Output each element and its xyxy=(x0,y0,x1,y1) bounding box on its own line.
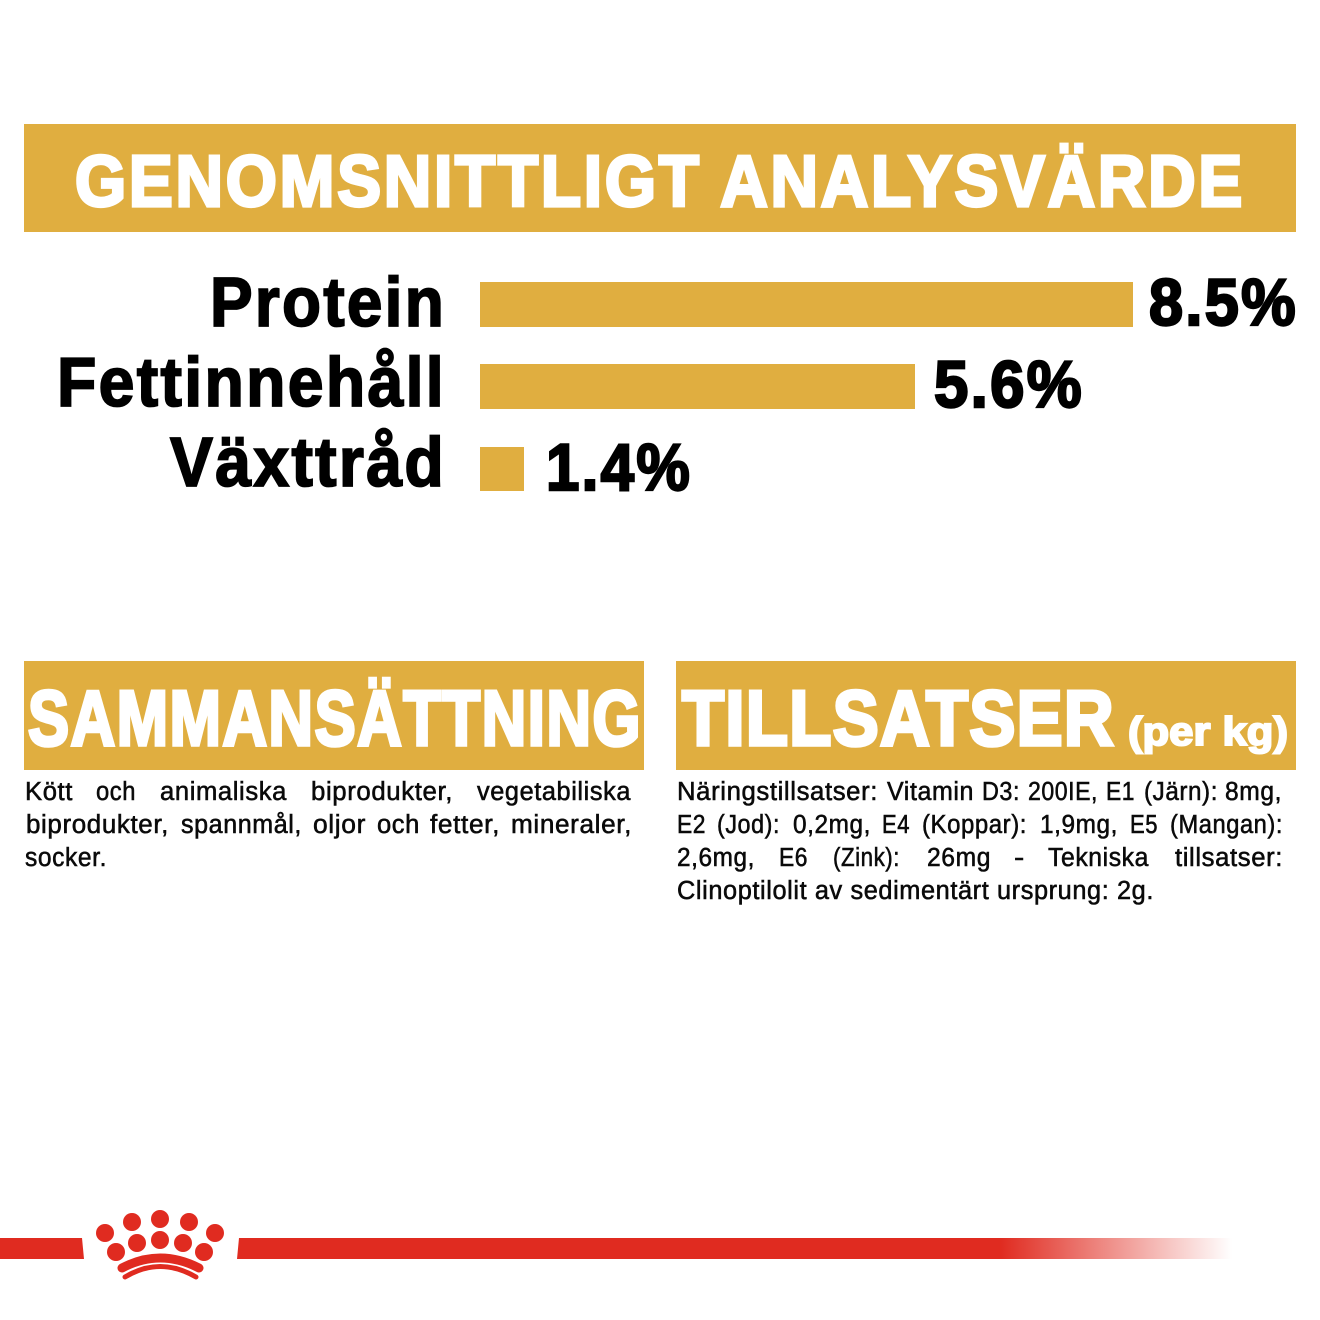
text block: additives: (Zink): xyxy=(833,844,900,872)
text block: composition: spannmål, xyxy=(181,811,302,839)
row: protein xyxy=(210,263,1298,341)
text block: composition: animaliska xyxy=(160,778,287,806)
text block: additives: - xyxy=(1014,844,1025,872)
heading: analysis: GENOMSNITTLIGT ANALYSVÄRDE xyxy=(75,142,1245,222)
text block: additives: (Mangan): xyxy=(1170,811,1283,839)
panel: analysis header xyxy=(24,124,1296,232)
text block: additives: E1 xyxy=(1106,778,1135,806)
text block: additives: 0,2mg, xyxy=(793,811,871,839)
row: protein: 8.5% xyxy=(1149,265,1298,339)
text block: composition xyxy=(25,778,632,872)
text block: additives: 2,6mg, xyxy=(677,844,755,872)
text block: composition: vegetabiliska xyxy=(477,778,631,806)
text block: composition: oljor xyxy=(313,811,366,839)
icon: royal crown logo xyxy=(96,1210,224,1277)
row: fat xyxy=(57,343,1084,421)
text block: composition: mineraler, xyxy=(511,811,632,839)
text block: additives xyxy=(677,778,1283,905)
panel: additives header xyxy=(676,661,1296,770)
row: fat: Fettinnehåll xyxy=(57,343,446,421)
text block: composition: och xyxy=(377,811,420,839)
text block: additives: D3: xyxy=(982,778,1020,806)
text block: additives: Vitamin xyxy=(887,778,974,806)
bar chart: analysis values xyxy=(57,263,1298,504)
text block: additives: (Koppar): xyxy=(922,811,1027,839)
text block: additives: Tekniska xyxy=(1048,844,1149,872)
heading: additives: TILLSATSER xyxy=(682,674,1115,762)
text block: additives: E5 xyxy=(1130,811,1158,839)
row: protein: Protein xyxy=(210,263,446,341)
row: fibre: Växttråd xyxy=(170,423,446,501)
text block: additives: (Jod): xyxy=(717,811,780,839)
row: fibre xyxy=(170,423,692,504)
text block: composition: Kött xyxy=(25,778,73,806)
text block: additives: 8mg, xyxy=(1225,778,1282,806)
heading suffix: per kg: (per kg) xyxy=(1128,710,1288,754)
text block: additives: 26mg xyxy=(927,844,991,872)
text block: additives: 1,9mg, xyxy=(1040,811,1118,839)
footer stripe: right fading xyxy=(237,1238,1232,1259)
text block: additives: 200IE, xyxy=(1028,778,1098,806)
text block: composition: biprodukter, xyxy=(311,778,453,806)
text block: additives: Näringstillsatser: xyxy=(677,778,878,806)
text block: additives: E4 xyxy=(882,811,910,839)
text block: additives: Clinoptilolit av sedimentärt ursprung: 2g. xyxy=(677,877,1154,905)
text block: additives: E2 xyxy=(677,811,706,839)
text block: additives: (Järn): xyxy=(1144,778,1218,806)
text block: composition: biprodukter, xyxy=(26,811,169,839)
text block: additives: tillsatser: xyxy=(1175,844,1283,872)
row: fibre: 1.4% xyxy=(546,430,692,504)
text block: composition: fetter, xyxy=(430,811,500,839)
text block: composition: socker. xyxy=(25,844,107,872)
heading: composition: SAMMANSÄTTNING xyxy=(28,674,642,762)
row: fat: 5.6% xyxy=(934,347,1084,421)
text block: additives: E6 xyxy=(779,844,808,872)
footer stripe: left xyxy=(0,1238,84,1259)
text block: composition: och xyxy=(96,778,136,806)
panel: composition header xyxy=(24,661,644,770)
